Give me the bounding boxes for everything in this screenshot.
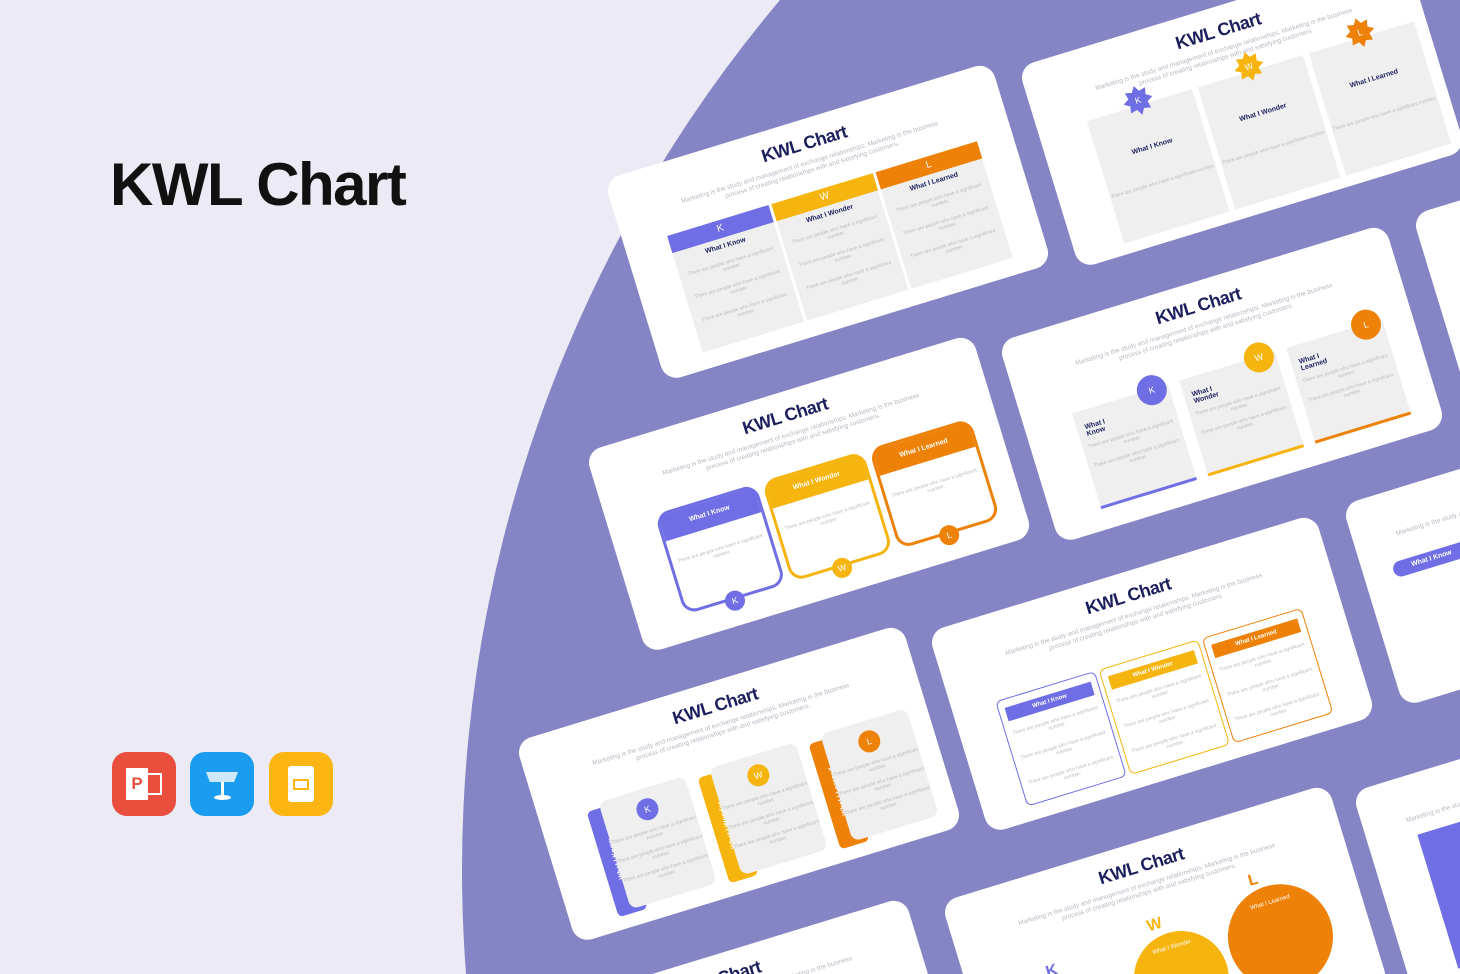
slide: table KWL — [604, 62, 1052, 382]
slide: vertical tabs: K — [643, 804, 652, 815]
box K: There are people who have a significant number. — [1027, 755, 1114, 786]
column K: There are people who have a significant number. — [701, 292, 788, 323]
column K — [1072, 384, 1197, 509]
column W — [771, 173, 908, 320]
box K: What I Know — [1032, 693, 1068, 710]
column K: There are people who have a significant number. — [687, 246, 774, 277]
slide: vertical tabs: There are people who have a significant number. — [722, 781, 808, 812]
column W: W — [818, 190, 831, 203]
slide: vertical tabs: There are people who have a significant number. — [832, 747, 919, 778]
slide: partial right middle: What I Know — [1410, 549, 1453, 568]
column L: There are people who have a significant number. — [1302, 353, 1388, 385]
tab K — [587, 803, 647, 917]
icon: google slides — [269, 752, 333, 816]
slide: table KWL: KWL Chart — [759, 121, 849, 166]
tab W: What I Wonder — [717, 801, 738, 849]
column W: There are people who have a significant number. — [798, 237, 885, 269]
slide: star badges: KWL Chart — [1173, 8, 1263, 53]
column L star: There are people who have a significant number. — [1332, 95, 1437, 133]
slide: big circles: KWL Chart — [1096, 843, 1186, 888]
column W star — [1198, 55, 1340, 210]
slide: vertical tabs: There are people who have a significant number. — [733, 819, 820, 850]
slide: outlined boxes: KWL Chart — [1083, 573, 1173, 618]
box K: What I Know — [688, 504, 731, 523]
column K: There are people who have a significant number. — [1087, 418, 1174, 450]
column K — [667, 205, 804, 352]
column L: L — [925, 159, 933, 171]
box K — [995, 671, 1127, 807]
slide: rounded boxes: K — [731, 595, 739, 606]
slide: vertical tabs: There are people who have a significant number. — [616, 834, 703, 865]
box L: What I Learned — [899, 438, 949, 459]
column W star: There are people who have a significant number. — [1221, 129, 1326, 166]
column W: What I Wonder — [1191, 386, 1220, 405]
slide: big circles: What I Wonder — [1152, 939, 1192, 956]
slide: star badges: W — [1243, 60, 1254, 72]
slide: vertical tabs: KWL Chart — [670, 683, 760, 728]
column K star: What I Know — [1131, 137, 1173, 156]
box L: There are people who have a significant number. — [1226, 666, 1313, 698]
column K: K — [715, 222, 725, 235]
slide: big circles: L — [1246, 871, 1260, 890]
tab L — [808, 736, 869, 849]
slide: partial right top — [1416, 200, 1460, 372]
box W: There are people who have a significant number. — [1131, 723, 1217, 755]
slide: big circles: W — [1145, 915, 1164, 935]
box W: There are people who have a significant number. — [784, 500, 871, 532]
slide: vertical tabs: W — [753, 769, 764, 781]
title: KWL Chart — [110, 151, 405, 218]
column L: What I Learned — [909, 171, 959, 193]
slide: big circles — [941, 784, 1389, 974]
slide: big circles: What I Learned — [1250, 894, 1291, 912]
column K: What I Know — [704, 236, 747, 255]
slide: bottom cut — [652, 900, 928, 974]
slide: star badges — [1018, 0, 1460, 269]
slide: rounded boxes: W — [837, 562, 848, 574]
slide: big circles: Marketing is the study and management of exchange relationships. Marketing is the business process of creating relationships with and satisfying customers. — [1018, 842, 1276, 927]
box W — [761, 451, 893, 582]
column W: There are people who have a significant number. — [791, 214, 878, 246]
slide: rounded boxes: L — [945, 530, 953, 541]
column W: There are people who have a significant number. — [1195, 386, 1281, 417]
slide: vertical tabs: There are people who have a significant number. — [622, 853, 709, 884]
column L: There are people who have a significant number. — [903, 205, 989, 237]
slide: circle columns: L — [1362, 319, 1370, 330]
slide: circle columns: K — [1147, 384, 1156, 396]
column L star — [1309, 21, 1451, 176]
slide: star badges: L — [1356, 27, 1364, 38]
icon: powerpoint — [112, 752, 176, 816]
slide: circle columns: Marketing is the study and management of exchange relationships. Marketing is the business process of creating relationships with and satisfying customers. — [1075, 282, 1333, 367]
slide: vertical tabs: There are people who have a significant number. — [611, 814, 697, 846]
box L: There are people who have a significant number. — [891, 467, 978, 499]
icon: powerpoint: P — [131, 774, 143, 793]
column L: There are people who have a significant number. — [896, 182, 982, 214]
box W: What I Wonder — [792, 471, 841, 492]
column K: There are people who have a significant number. — [1093, 438, 1180, 469]
column W: What I Wonder — [805, 203, 854, 224]
slide: circle columns: KWL Chart — [1153, 283, 1243, 328]
column W: There are people who have a significant number. — [805, 260, 892, 291]
slide: vertical tabs: Marketing is the study and management of exchange relationships. Marketing is the business process of creating relationships with and satisfying customers. — [592, 682, 850, 767]
column L star: What I Learned — [1349, 68, 1399, 90]
tab W — [698, 769, 758, 883]
slide: rounded boxes — [585, 334, 1033, 654]
column W: There are people who have a significant number. — [1200, 405, 1287, 436]
box K — [654, 483, 786, 615]
slide: star badges: K — [1134, 95, 1142, 106]
icon: keynote — [190, 752, 254, 816]
app icons — [112, 752, 333, 816]
column L — [1286, 319, 1411, 444]
box W: What I Wonder — [1132, 661, 1174, 679]
box K: There are people who have a significant number. — [1020, 730, 1106, 761]
box L — [1202, 608, 1333, 743]
tab L: What I Learned — [828, 766, 849, 816]
slide: outlined boxes — [928, 514, 1376, 834]
box K: There are people who have a significant number. — [1012, 705, 1099, 736]
slide: circle columns — [998, 224, 1446, 544]
box L — [869, 418, 1001, 549]
slide: vertical tabs: There are people who have a significant number. — [844, 785, 931, 817]
box L: What I Learned — [1235, 629, 1278, 647]
slide: rounded boxes: Marketing is the study and management of exchange relationships. Marketing is the business process of creating relationships with and satisfying customers. — [662, 392, 920, 477]
column L — [876, 141, 1012, 288]
column L: What I Learned — [1298, 353, 1328, 372]
column K: What I Know — [1084, 418, 1106, 438]
column K star — [1087, 89, 1229, 244]
slide: star badges: Marketing is the study and management of exchange relationships. Marketing is the business process of creating relationships with and satisfying customers. — [1095, 7, 1353, 92]
slide: outlined boxes: Marketing is the study and management of exchange relationships. Marketing is the business process of creating relationships with and satisfying customers. — [1005, 572, 1263, 657]
tab K: What I Know — [607, 838, 626, 880]
slide: circle columns: W — [1253, 351, 1264, 363]
box W: There are people who have a significant number. — [1115, 673, 1202, 705]
slide: vertical tabs — [515, 624, 963, 944]
column L: There are people who have a significant number. — [1308, 372, 1394, 404]
box W: There are people who have a significant number. — [1123, 698, 1210, 730]
slide: vertical tabs: There are people who have a significant number. — [838, 766, 925, 797]
box K: There are people who have a significant number. — [677, 533, 763, 565]
box L: There are people who have a significant number. — [1234, 691, 1321, 723]
column W star: What I Wonder — [1239, 102, 1288, 123]
slide: vertical tabs: L — [865, 736, 873, 747]
box W — [1099, 639, 1230, 775]
column L: There are people who have a significant number. — [910, 228, 996, 260]
column K star: There are people who have a significant number. — [1110, 163, 1215, 200]
slide: partial right middle — [1346, 468, 1460, 703]
slide: table KWL: Marketing is the study and management of exchange relationships. Marketing is the business process of creating relationships with and satisfying customers. — [681, 120, 939, 205]
purple background shape — [462, 0, 1460, 974]
column K: There are people who have a significant number. — [694, 269, 781, 300]
slide: rounded boxes: KWL Chart — [740, 393, 830, 438]
box L: There are people who have a significant number. — [1219, 642, 1305, 673]
column W — [1179, 351, 1304, 476]
slide: partial right bottom — [1356, 759, 1460, 974]
slide: vertical tabs: There are people who have a significant number. — [727, 800, 814, 831]
